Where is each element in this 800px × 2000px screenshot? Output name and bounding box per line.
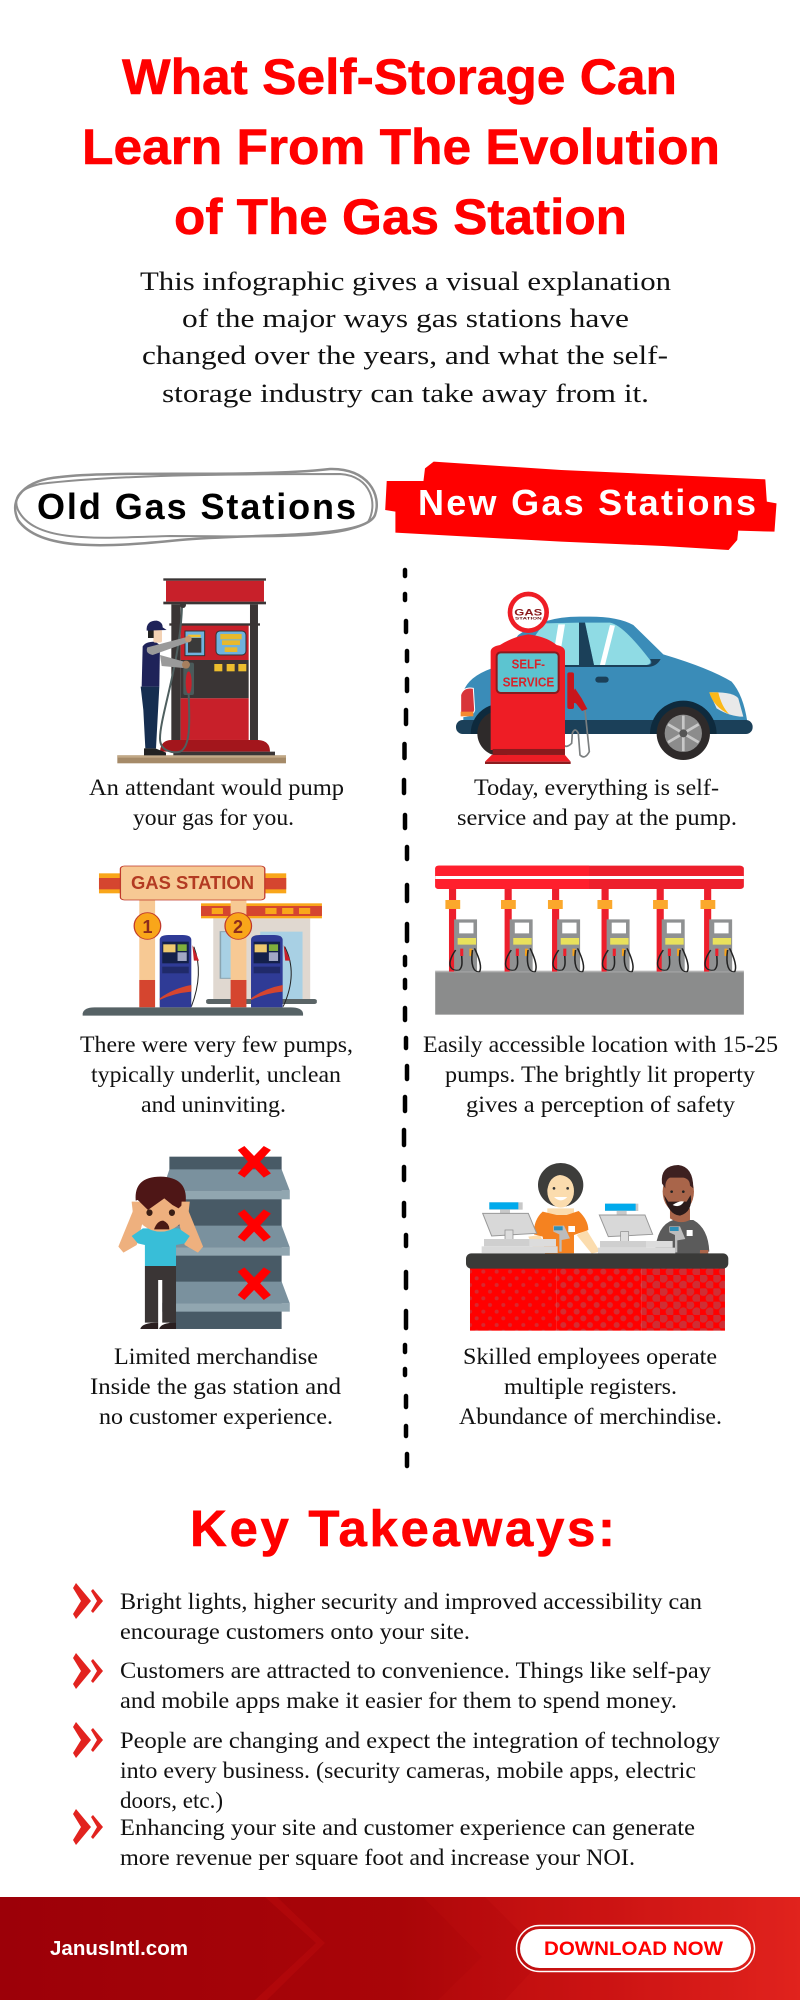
text: old merchandise: Limited merchandise (114, 1344, 318, 1369)
takeaway 1 (73, 1583, 703, 1644)
text: new location: pumps. The brightly lit property (445, 1062, 756, 1087)
intro text: changed over the years, and what the self- (142, 341, 668, 370)
text: old pumps: typically underlit, unclean (91, 1062, 342, 1087)
title: Learn From The Evolution (82, 119, 720, 175)
icon: attendant at old gas pump (117, 578, 286, 763)
icon: car at self-service pump (456, 592, 753, 764)
takeaway 3: into every business. (security cameras, mobile apps, electric (120, 1758, 696, 1783)
icon: modern gas station canopy with six pumps (435, 866, 744, 1015)
text: old merchandise: no customer experience. (99, 1404, 333, 1429)
icon: car at self-service pump: SELF- (512, 656, 545, 671)
takeaway 3 (73, 1722, 721, 1813)
text: old pumps (80, 1032, 353, 1117)
heading: old gas stations (15, 469, 377, 545)
intro text: of the major ways gas stations have (182, 304, 629, 333)
icon: car at self-service pump: STATION (515, 617, 542, 621)
text: new employees: multiple registers. (504, 1374, 677, 1399)
text: new location (423, 1032, 778, 1117)
heading: old gas stations: Old Gas Stations (37, 486, 356, 527)
text: old pumps: There were very few pumps, (80, 1032, 353, 1057)
text: new self-service: service and pay at the pump. (457, 805, 737, 830)
title: of The Gas Station (174, 189, 627, 245)
takeaway 4: more revenue per square foot and increase your NOI. (120, 1845, 635, 1870)
intro text (140, 267, 671, 408)
takeaway 3: People are changing and expect the integration of technology (120, 1728, 721, 1753)
footer banner: JanusIntl.com (50, 1938, 188, 1960)
dashed divider (404, 570, 407, 1466)
intro text: This infographic gives a visual explanation (140, 267, 671, 296)
footer banner (0, 1897, 800, 2000)
takeaway 1: Bright lights, higher security and improved accessibility can (120, 1589, 703, 1614)
takeaway 4: Enhancing your site and customer experience can generate (120, 1815, 695, 1840)
icon: employees at registers behind counter (466, 1163, 728, 1331)
title (82, 49, 720, 245)
icon: worried person beside empty shelves (118, 1146, 290, 1329)
heading: new gas stations (385, 462, 777, 550)
text: old pumps: and uninviting. (141, 1092, 286, 1117)
text: old merchandise: Inside the gas station and (90, 1374, 342, 1399)
intro text: storage industry can take away from it. (162, 379, 649, 408)
text: old attendant: your gas for you. (133, 805, 294, 830)
text: new employees: Skilled employees operate (463, 1344, 717, 1369)
text: old merchandise (90, 1344, 342, 1429)
text: new location: Easily accessible location with 15-25 (423, 1032, 778, 1057)
text: new self-service: Today, everything is self- (474, 775, 719, 800)
icon: car at self-service pump: GAS (514, 608, 542, 618)
heading: new gas stations: New Gas Stations (418, 482, 756, 523)
takeaway 1: encourage customers onto your site. (120, 1619, 470, 1644)
icon: old gas station with two pumps: GAS STATION (131, 873, 254, 893)
takeaway 2: Customers are attracted to convenience. Things like self-pay (120, 1658, 712, 1683)
takeaway 2 (73, 1653, 712, 1713)
icon: car at self-service pump: SERVICE (503, 675, 554, 690)
text: old attendant (89, 775, 344, 830)
text: new employees: Abundance of merchindise. (459, 1404, 722, 1429)
takeaway list (73, 1583, 721, 1870)
takeaway 2: and mobile apps make it easier for them to spend money. (120, 1688, 677, 1713)
icon: old gas station with two pumps: 1 (142, 917, 153, 937)
takeaway 4 (73, 1809, 695, 1870)
text: new location: gives a perception of safety (466, 1092, 736, 1117)
icon: old gas station with two pumps: 2 (233, 917, 243, 937)
heading: key takeaways: Key Takeaways: (190, 1500, 615, 1557)
takeaway 3: doors, etc.) (120, 1788, 223, 1813)
button: download now (516, 1926, 754, 1972)
button: download now: DOWNLOAD NOW (544, 1938, 724, 1960)
text: new employees (459, 1344, 722, 1429)
text: old attendant: An attendant would pump (89, 775, 344, 800)
icon: old gas station with two pumps (83, 866, 322, 1016)
text: new self-service (457, 775, 737, 830)
title: What Self-Storage Can (122, 49, 677, 105)
